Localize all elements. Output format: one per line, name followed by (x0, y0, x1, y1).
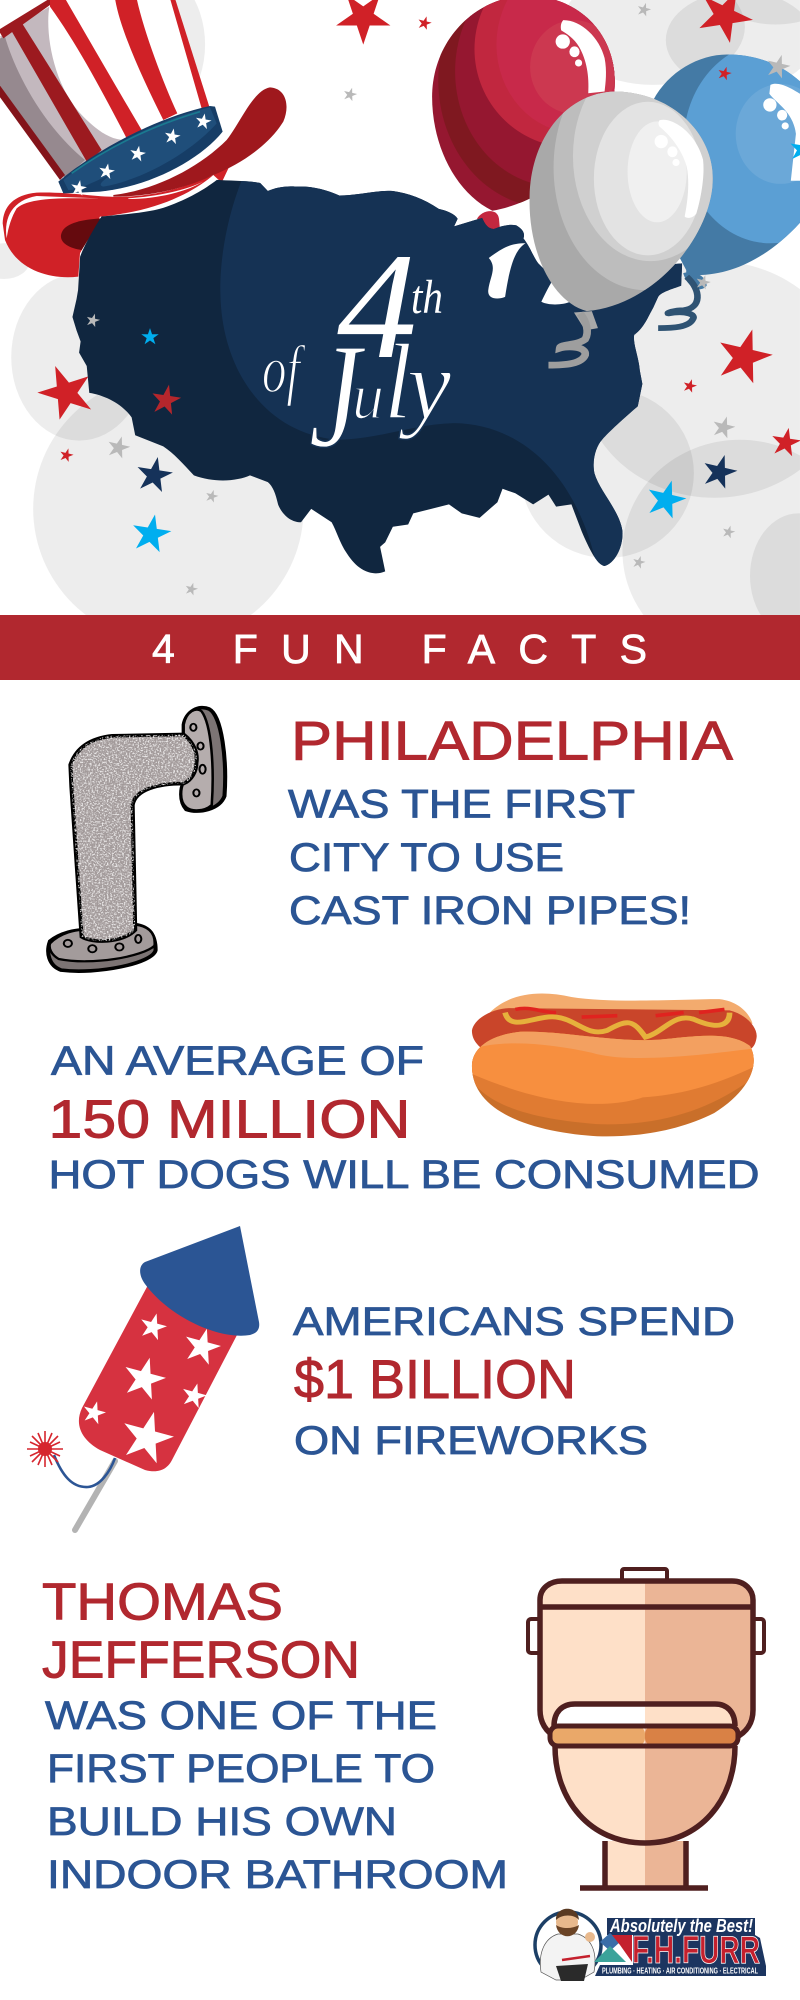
icon: firework rocket (27, 1226, 259, 1530)
text: Philadelphia fact: CITY TO USE (289, 836, 564, 880)
text: Jefferson fact: FIRST PEOPLE TO (47, 1747, 435, 1791)
text: hot dogs fact: AN AVERAGE OF (51, 1038, 424, 1084)
title: 4th of July: u (352, 360, 384, 433)
text: fireworks fact: ON FIREWORKS (294, 1419, 648, 1463)
text: Jefferson fact: JEFFERSON (42, 1632, 360, 1690)
text: fireworks fact (293, 1300, 735, 1463)
title: 4th of July: y (398, 329, 452, 440)
text: hot dogs fact (48, 1038, 760, 1197)
title: 4th of July: 4 (337, 222, 417, 390)
icon: uncle sam hat (0, 0, 287, 277)
logo mascot (535, 1909, 601, 1981)
logo wordmark: Absolutely the Best! (609, 1916, 753, 1936)
background bubbles (0, 0, 800, 663)
text: fireworks fact: $1 BILLION (294, 1348, 576, 1410)
panel: fact 1 Philadelphia (48, 708, 733, 971)
title: 4th of July (262, 222, 452, 479)
text: fireworks fact: AMERICANS SPEND (293, 1300, 735, 1344)
icon: red balloon (432, 0, 615, 229)
text: Jefferson fact: BUILD HIS OWN (47, 1800, 397, 1844)
map of the USA (72, 179, 714, 580)
icon: blue balloon (654, 54, 800, 331)
text: Jefferson fact: WAS ONE OF THE (45, 1694, 437, 1738)
banner (0, 615, 800, 680)
text: hot dogs fact: 150 MILLION (48, 1090, 410, 1150)
panel: hero illustration (0, 0, 800, 680)
text: Jefferson fact: INDOOR BATHROOM (47, 1853, 508, 1897)
stars behind the map (30, 0, 800, 596)
panel: fact 2 hot dogs (48, 994, 765, 1197)
panel: fact 4 Thomas Jefferson (42, 1569, 764, 1897)
text: Jefferson fact: THOMAS (42, 1574, 283, 1632)
title: 4th of July: of (262, 331, 306, 407)
logo: F.H. Furr (535, 1909, 766, 1981)
text: Philadelphia fact: PHILADELPHIA (291, 710, 733, 772)
panel: fact 3 fireworks (27, 1226, 735, 1530)
text: hot dogs fact: HOT DOGS WILL BE CONSUMED (48, 1153, 760, 1197)
icon: hot dog (459, 994, 765, 1136)
title: 4th of July: th (411, 271, 443, 324)
text: Jefferson fact (42, 1574, 508, 1897)
logo wordmark (594, 1916, 766, 1976)
banner: 4 FUN FACTS (152, 626, 647, 672)
title: 4th of July: l (384, 323, 412, 442)
text: Philadelphia fact (288, 710, 733, 933)
text: Philadelphia fact: WAS THE FIRST (288, 782, 635, 826)
icon: cast iron pipe (48, 708, 225, 971)
text: Philadelphia fact: CAST IRON PIPES! (289, 889, 691, 933)
icon: silver balloon (530, 92, 713, 368)
title: 4th of July: J (309, 313, 366, 479)
icon: toilet (528, 1569, 764, 1888)
